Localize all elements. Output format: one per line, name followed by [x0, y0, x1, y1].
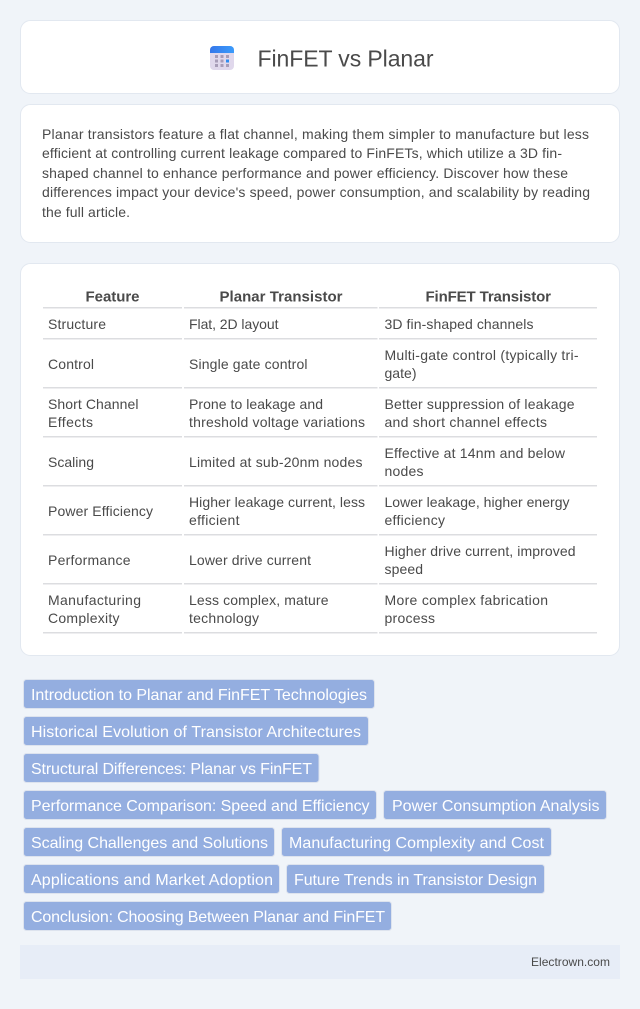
tag list: article sections	[24, 680, 606, 930]
table header: FinFET Transistor	[426, 288, 551, 306]
row: Short Channel Effects: Better suppression of leakage	[384, 396, 575, 412]
row: Power Efficiency: Higher leakage current, less	[189, 494, 365, 510]
tag: power: Power Consumption Analysis	[392, 798, 600, 815]
row: Manufacturing Complexity	[43, 592, 597, 634]
footer credit: Electrown.com	[531, 955, 610, 969]
intro text	[42, 126, 590, 220]
tag: applications	[24, 864, 280, 894]
intro text: differences impact your device's speed, power consumption, and scalability by reading	[42, 184, 590, 200]
intro text: shaped channel to enhance performance and power efficiency. Discover how these	[42, 165, 568, 181]
row: Short Channel Effects: threshold voltage variations	[189, 414, 365, 430]
row: Structure: Flat, 2D layout	[189, 316, 279, 332]
header panel	[20, 20, 620, 94]
row: Power Efficiency: efficiency	[384, 512, 445, 528]
tag: structure	[24, 754, 319, 782]
tag: future: Future Trends in Transistor Design	[294, 872, 537, 889]
row: Short Channel Effects	[43, 396, 597, 438]
row: Manufacturing Complexity: technology	[189, 610, 259, 626]
row: Short Channel Effects: and short channel effects	[384, 414, 547, 430]
row: Short Channel Effects: Short Channel	[48, 396, 138, 412]
icon: calendar	[210, 46, 234, 70]
row: Control: gate)	[384, 365, 416, 381]
tag: applications: Applications and Market Adoption	[31, 872, 273, 889]
row: Short Channel Effects: Prone to leakage and	[189, 396, 323, 412]
tag: introduction: Introduction to Planar and FinFET Technologies	[31, 687, 367, 704]
row: Structure: Structure	[48, 316, 106, 332]
row: Performance: speed	[384, 561, 423, 577]
tag: structure: Structural Differences: Planar vs FinFET	[31, 761, 312, 778]
row: Scaling: Limited at sub-20nm nodes	[189, 454, 362, 470]
tag: manufacturing	[282, 828, 552, 856]
row: Scaling: Effective at 14nm and below	[384, 445, 566, 461]
row: Performance: Lower drive current	[189, 552, 311, 568]
tag: scaling	[24, 828, 274, 856]
row: Manufacturing Complexity: Complexity	[48, 610, 120, 626]
row: Control	[43, 347, 597, 388]
intro text: Planar transistors feature a flat channel, making them simpler to manufacture but less	[42, 126, 589, 142]
row: Structure	[43, 316, 597, 340]
tag: conclusion	[24, 902, 392, 930]
table header: Planar Transistor	[220, 288, 343, 306]
tag: history	[24, 716, 368, 746]
tag: performance: Performance Comparison: Speed and Efficiency	[31, 798, 370, 815]
row: Power Efficiency: Lower leakage, higher energy	[384, 494, 570, 510]
tag: introduction	[24, 680, 374, 708]
title: FinFET vs Planar	[258, 46, 434, 72]
row: Control: Single gate control	[189, 356, 308, 372]
row: Power Efficiency	[43, 494, 597, 536]
panel: comparison table	[20, 264, 620, 656]
row: Control: Control	[48, 356, 94, 372]
row: Structure: 3D fin-shaped channels	[384, 316, 534, 332]
row: Control: Multi-gate control (typically tri-	[384, 347, 579, 363]
row: Performance: Performance	[48, 552, 131, 568]
tag: history: Historical Evolution of Transistor Architectures	[31, 724, 361, 741]
table header	[43, 288, 597, 308]
row: Performance	[43, 543, 597, 584]
row: Short Channel Effects: Effects	[48, 414, 93, 430]
intro text: efficient at controlling current leakage compared to FinFETs, which utilize a 3D fin-	[42, 145, 562, 161]
row: Manufacturing Complexity: Manufacturing	[48, 592, 141, 608]
row: Power Efficiency: Power Efficiency	[48, 503, 153, 519]
row: Manufacturing Complexity: More complex fabrication	[384, 592, 548, 608]
tag: scaling: Scaling Challenges and Solutions	[31, 835, 268, 852]
tag: conclusion: Conclusion: Choosing Between Planar and FinFET	[31, 909, 385, 926]
row: Manufacturing Complexity: process	[384, 610, 435, 626]
row: Scaling: Scaling	[48, 454, 94, 470]
table header: Feature	[86, 288, 140, 306]
intro text: the full article.	[42, 204, 130, 220]
panel: introduction	[20, 104, 620, 242]
footer	[20, 945, 620, 979]
row: Scaling	[43, 445, 597, 486]
row: Manufacturing Complexity: Less complex, mature	[189, 592, 329, 608]
tag: performance	[24, 790, 376, 820]
row: Performance: Higher drive current, improved	[384, 543, 576, 559]
tag: manufacturing: Manufacturing Complexity and Cost	[289, 835, 545, 852]
row: Scaling: nodes	[384, 463, 424, 479]
row: Power Efficiency: efficient	[189, 512, 240, 528]
tag: future	[286, 864, 544, 894]
tag: power	[384, 790, 606, 820]
